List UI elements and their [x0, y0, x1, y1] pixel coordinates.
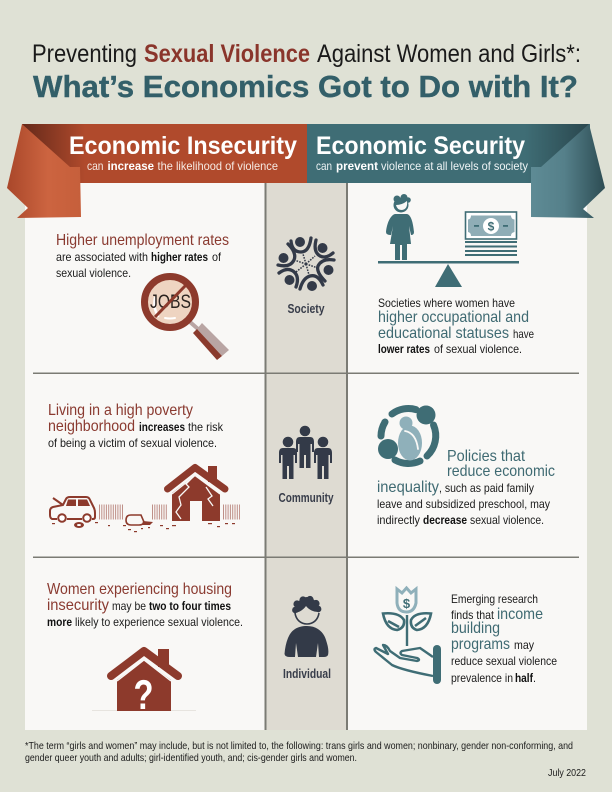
text: societies where women have: of sexual violence.: [434, 342, 522, 356]
text: policies that reduce inequality: , such as paid family: [439, 481, 534, 495]
text: societies where women have: [378, 296, 534, 356]
text: emerging research: .: [533, 671, 536, 685]
text: societies where women have: lower rates: [378, 342, 430, 356]
text: higher unemployment rates: [56, 232, 229, 280]
text: policies that reduce inequality: inequality: [377, 479, 439, 496]
text: policies that reduce inequality: [377, 448, 555, 527]
icon: individual: [284, 596, 328, 657]
money stack: $: [488, 220, 495, 234]
text: emerging research: prevalence in: [451, 671, 513, 685]
center column: [264, 183, 348, 730]
text: higher unemployment rates: are associated with: [56, 250, 148, 264]
banner heading: economic insecurity: Economic Insecurity: [69, 132, 297, 160]
text: women experiencing housing insecurity: [47, 581, 243, 629]
text: higher unemployment rates: of: [212, 250, 222, 264]
title: Against Women and Girls*:: [317, 40, 581, 68]
date: July 2022: [548, 767, 586, 779]
text: high poverty neighborhood: [48, 402, 224, 450]
banner heading: economic security: prevent: [336, 159, 378, 173]
title: What’s Economics Got to Do with It?: [33, 69, 578, 104]
balance beam: [378, 261, 519, 264]
text: women experiencing housing insecurity: may be: [112, 599, 146, 613]
text: emerging research: may: [514, 638, 534, 652]
banner heading: economic security: violence at all levels of society: [381, 159, 528, 173]
broken house: [168, 466, 225, 521]
title: [32, 40, 581, 104]
money stack: [465, 212, 517, 256]
ribbon tail: right: [531, 124, 605, 218]
icon: society: [278, 237, 334, 291]
text: higher unemployment rates: higher rates: [151, 250, 208, 264]
text: higher unemployment rates: Higher unemployment rates: [56, 232, 229, 249]
text: high poverty neighborhood: the risk: [188, 420, 224, 434]
ribbon tail: left: [7, 124, 81, 218]
text: emerging research: half: [515, 671, 534, 685]
icon: magnifying glass over jobs: [144, 276, 229, 360]
text: societies where women have: Societies where women have: [378, 296, 515, 310]
label: community: Community: [278, 491, 334, 505]
money tulip: $: [403, 596, 411, 611]
text: emerging research: programs: [451, 636, 510, 653]
text: emerging research: building: [451, 620, 500, 637]
banner heading: economic security: [316, 132, 528, 173]
text: societies where women have: higher occupational and: [378, 309, 529, 326]
open hand: [374, 645, 441, 684]
text: women experiencing housing insecurity: Women experiencing housing: [47, 581, 232, 598]
text: policies that reduce inequality: leave and subsidized preschool, may: [377, 497, 550, 511]
title: Preventing: [32, 40, 137, 68]
text: women experiencing housing insecurity: two to four times: [149, 599, 231, 613]
tipped barrel: [126, 515, 153, 525]
text: emerging research: [451, 592, 557, 685]
text: societies where women have: educational statuses: [378, 325, 509, 342]
icon: house with question mark: ?: [134, 671, 154, 718]
icon: money flower in hand: [374, 588, 441, 684]
icon: house with question mark: [92, 649, 196, 718]
banner heading: economic security: Economic Security: [316, 132, 525, 160]
banner heading: economic security: can: [316, 159, 332, 173]
text: high poverty neighborhood: Living in a high poverty: [48, 402, 193, 419]
label: individual: Individual: [283, 667, 331, 681]
icon: woman and money on balance scale: [378, 194, 519, 287]
text: policies that reduce inequality: decrease: [423, 513, 467, 527]
text: high poverty neighborhood: neighborhood: [48, 418, 135, 435]
text: emerging research: income: [497, 606, 543, 623]
text: societies where women have: have: [513, 327, 534, 341]
text: women experiencing housing insecurity: likely to experience sexual violence.: [75, 615, 243, 629]
text: higher unemployment rates: sexual violence.: [56, 266, 131, 280]
title: Sexual Violence: [144, 40, 310, 68]
text: policies that reduce inequality: reduce economic: [447, 463, 555, 480]
footnote: gender queer youth and adults; girl-identified youth, and; cis-gender girls and women.: [25, 752, 357, 764]
icon: magnifying glass over jobs: JOBS: [150, 292, 191, 313]
text: policies that reduce inequality: Policies that: [447, 448, 526, 465]
stem and leaves: [383, 613, 431, 646]
footnote: [25, 740, 573, 764]
icon: community: [279, 426, 332, 479]
banner heading: economic insecurity: the likelihood of violence: [158, 159, 278, 173]
icon: run-down neighborhood scene: [50, 466, 240, 532]
woman: [386, 194, 414, 260]
text: policies that reduce inequality: indirectly: [377, 513, 420, 527]
main white panel: [25, 180, 587, 730]
text: emerging research: finds that: [451, 608, 495, 622]
balance fulcrum: [435, 264, 462, 287]
banner heading: economic insecurity: increase: [108, 159, 154, 173]
text: women experiencing housing insecurity: insecurity: [47, 597, 109, 614]
text: emerging research: reduce sexual violence: [451, 654, 557, 668]
text: high poverty neighborhood: of being a victim of sexual violence.: [48, 436, 217, 450]
text: emerging research: Emerging research: [451, 592, 538, 606]
text: policies that reduce inequality: sexual violence.: [470, 513, 544, 527]
text: women experiencing housing insecurity: more: [47, 615, 72, 629]
text: high poverty neighborhood: increases: [139, 420, 185, 434]
debris: [52, 522, 235, 532]
broken car: [50, 497, 95, 528]
banner heading: economic insecurity: can: [87, 159, 104, 173]
dry grass: [99, 504, 240, 520]
icon: family circle: [378, 406, 436, 464]
label: society: Society: [288, 302, 325, 316]
banner heading: economic insecurity: [69, 132, 297, 173]
banner ribbon: [7, 124, 605, 218]
